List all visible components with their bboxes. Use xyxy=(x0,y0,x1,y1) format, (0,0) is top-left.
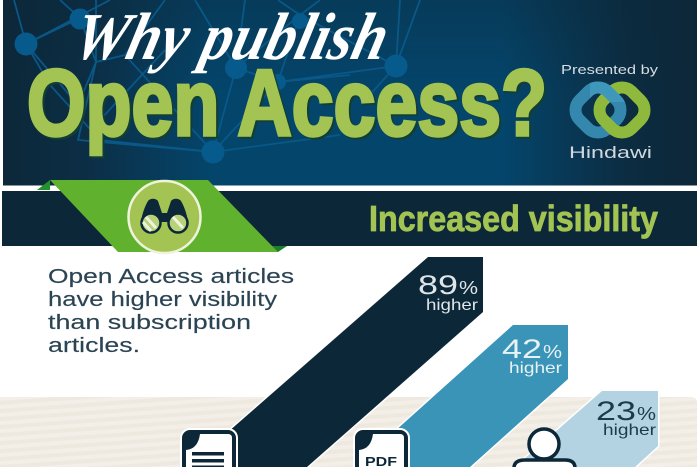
title line: Why publish: Why publish xyxy=(66,0,397,74)
panel: header xyxy=(3,0,697,186)
bar: 23% higher: higher xyxy=(603,422,657,439)
bar: 42% higher: % xyxy=(543,342,562,362)
bar: 23% higher: % xyxy=(637,404,656,424)
title line: Open Access?: Open Access? xyxy=(29,52,549,157)
network graphic xyxy=(14,0,420,164)
section band xyxy=(2,191,697,246)
body text: than subscription xyxy=(48,312,251,334)
ribbon xyxy=(37,180,287,252)
bar: 89% higher: 89 xyxy=(418,270,458,300)
body text: articles. xyxy=(48,335,140,357)
bar: 42% higher xyxy=(355,325,568,467)
presented by label: Presented by xyxy=(561,62,659,77)
bar: 23% higher: 23 xyxy=(596,396,636,426)
bar: 42% higher: 42 xyxy=(502,334,542,364)
title line: Open Access?: Open Access? xyxy=(27,50,547,155)
icon: reader person xyxy=(514,429,575,467)
icon: PDF file xyxy=(354,429,409,467)
bar: 23% higher xyxy=(515,391,658,467)
section heading: Increased visibility xyxy=(369,198,658,239)
bar: 89% higher: higher xyxy=(426,297,479,314)
icon: binoculars badge xyxy=(128,181,200,253)
panel: striped background xyxy=(0,397,697,467)
icon: Hindawi logo xyxy=(570,82,650,138)
bar: 89% higher: % xyxy=(459,278,478,298)
body text xyxy=(48,266,294,357)
body text: have higher visibility xyxy=(48,289,277,311)
body text: Open Access articles xyxy=(48,266,294,288)
icon: document xyxy=(181,429,237,467)
bar: 89% higher xyxy=(188,257,483,467)
bar: 42% higher: higher xyxy=(509,360,563,377)
Hindawi wordmark: Hindawi xyxy=(569,143,652,162)
